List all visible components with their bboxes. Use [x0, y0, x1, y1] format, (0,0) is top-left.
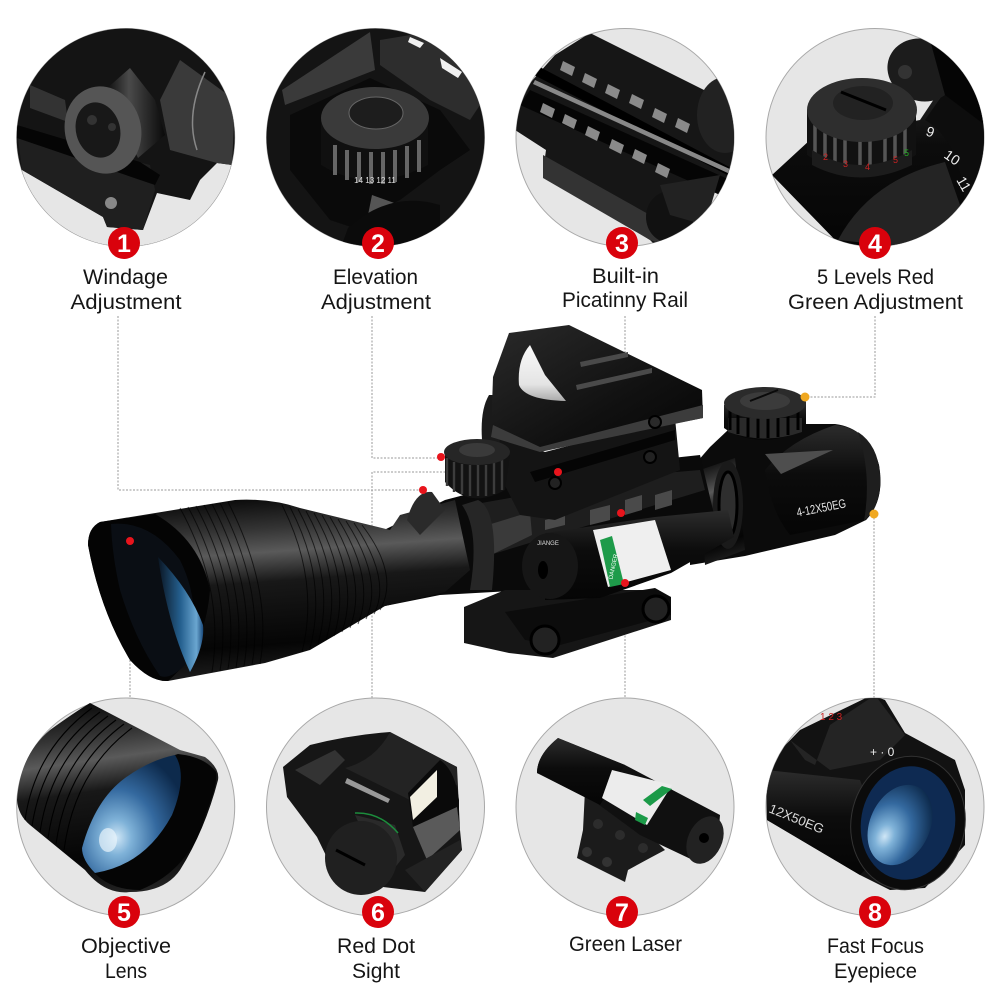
red dot sight: [482, 325, 703, 520]
label: Green Laser: [569, 932, 682, 956]
laser and mount: [464, 510, 734, 658]
red dot sight detail image: [283, 732, 462, 895]
label: Sight: [352, 959, 400, 983]
badge 1: 1: [117, 230, 131, 258]
illumination knob detail image: 9: [924, 123, 937, 141]
label: [70, 265, 182, 314]
label: [562, 264, 688, 312]
eyepiece magnification text: 4-12X50EG: [795, 496, 847, 520]
label: [827, 934, 924, 983]
turret: illumination knob: [724, 387, 806, 440]
badge 8: 8: [868, 899, 882, 927]
windage knob: [407, 492, 445, 535]
elevation detail image: 14 13 12 11: [354, 176, 396, 185]
badge 5: 5: [117, 899, 131, 927]
label: Adjustment: [321, 290, 431, 314]
eyepiece detail image: 12X50EG: [767, 801, 826, 837]
label: [81, 934, 171, 983]
illumination knob detail image: 5: [893, 155, 898, 165]
label: Green Adjustment: [788, 290, 963, 314]
eyepiece bell: [690, 424, 880, 565]
eyepiece detail image: + · 0: [870, 745, 895, 759]
badge 1: [108, 227, 140, 259]
illumination knob detail image: 4: [865, 162, 870, 172]
badge 8: [859, 896, 891, 928]
panel: windage adjustment: [15, 28, 236, 314]
label: Elevation: [333, 265, 418, 289]
badge 6: 6: [371, 899, 385, 927]
label: Red Dot: [337, 934, 415, 958]
badge 2: 2: [371, 230, 385, 258]
panel: fast focus eyepiece: [766, 695, 984, 983]
badge 3: [606, 227, 638, 259]
illumination knob detail image: 3: [843, 159, 848, 169]
elevation detail image: [266, 28, 490, 250]
label: Built-in: [592, 264, 659, 288]
badge 2: [362, 227, 394, 259]
badge 5: [108, 896, 140, 928]
objective bell: [88, 500, 470, 681]
badge 7: [606, 896, 638, 928]
windage detail image: [15, 28, 236, 250]
label: [321, 265, 431, 314]
illumination knob detail image: 10: [941, 146, 963, 169]
illumination knob detail image: 2: [823, 152, 828, 162]
central tube and rail block: [380, 455, 720, 606]
panel: elevation adjustment: [266, 28, 490, 314]
rail detail image: [516, 34, 734, 243]
label: Lens: [105, 959, 147, 983]
panel: green laser: [516, 698, 734, 956]
label: Windage: [83, 265, 168, 289]
laser and mount: JIANGE: [537, 541, 559, 547]
badge 4: [859, 227, 891, 259]
label: Picatinny Rail: [562, 288, 688, 312]
objective lens detail image: [17, 703, 218, 892]
label: Adjustment: [70, 290, 182, 314]
badge 7: 7: [615, 899, 629, 927]
main scope illustration: [88, 325, 880, 681]
connector lines: [118, 316, 875, 700]
label: Fast Focus: [827, 934, 924, 958]
panel: objective lens: [17, 698, 235, 983]
illumination knob detail image: [772, 38, 984, 246]
illumination knob detail image: 5: [904, 148, 909, 158]
label: Objective: [81, 934, 171, 958]
eyepiece detail image: [766, 698, 966, 890]
callout dots: [126, 392, 878, 587]
illumination knob detail image: 11: [953, 174, 975, 194]
badge 6: [362, 896, 394, 928]
laser and mount: DANGER: [608, 553, 620, 580]
panel: built-in picatinny rail: [515, 28, 753, 312]
label: [788, 265, 963, 314]
turret: elevation knob: [444, 439, 510, 498]
panel: 5 levels red green adjustment: [766, 28, 995, 314]
badge 4: 4: [868, 230, 882, 258]
green laser detail image: [537, 738, 731, 882]
label: [337, 934, 415, 983]
eyepiece detail image: 1 2 3: [820, 712, 843, 723]
label: Eyepiece: [834, 959, 917, 983]
label: 5 Levels Red: [817, 265, 934, 289]
badge 3: 3: [615, 230, 629, 258]
panel: red dot sight: [266, 698, 484, 983]
